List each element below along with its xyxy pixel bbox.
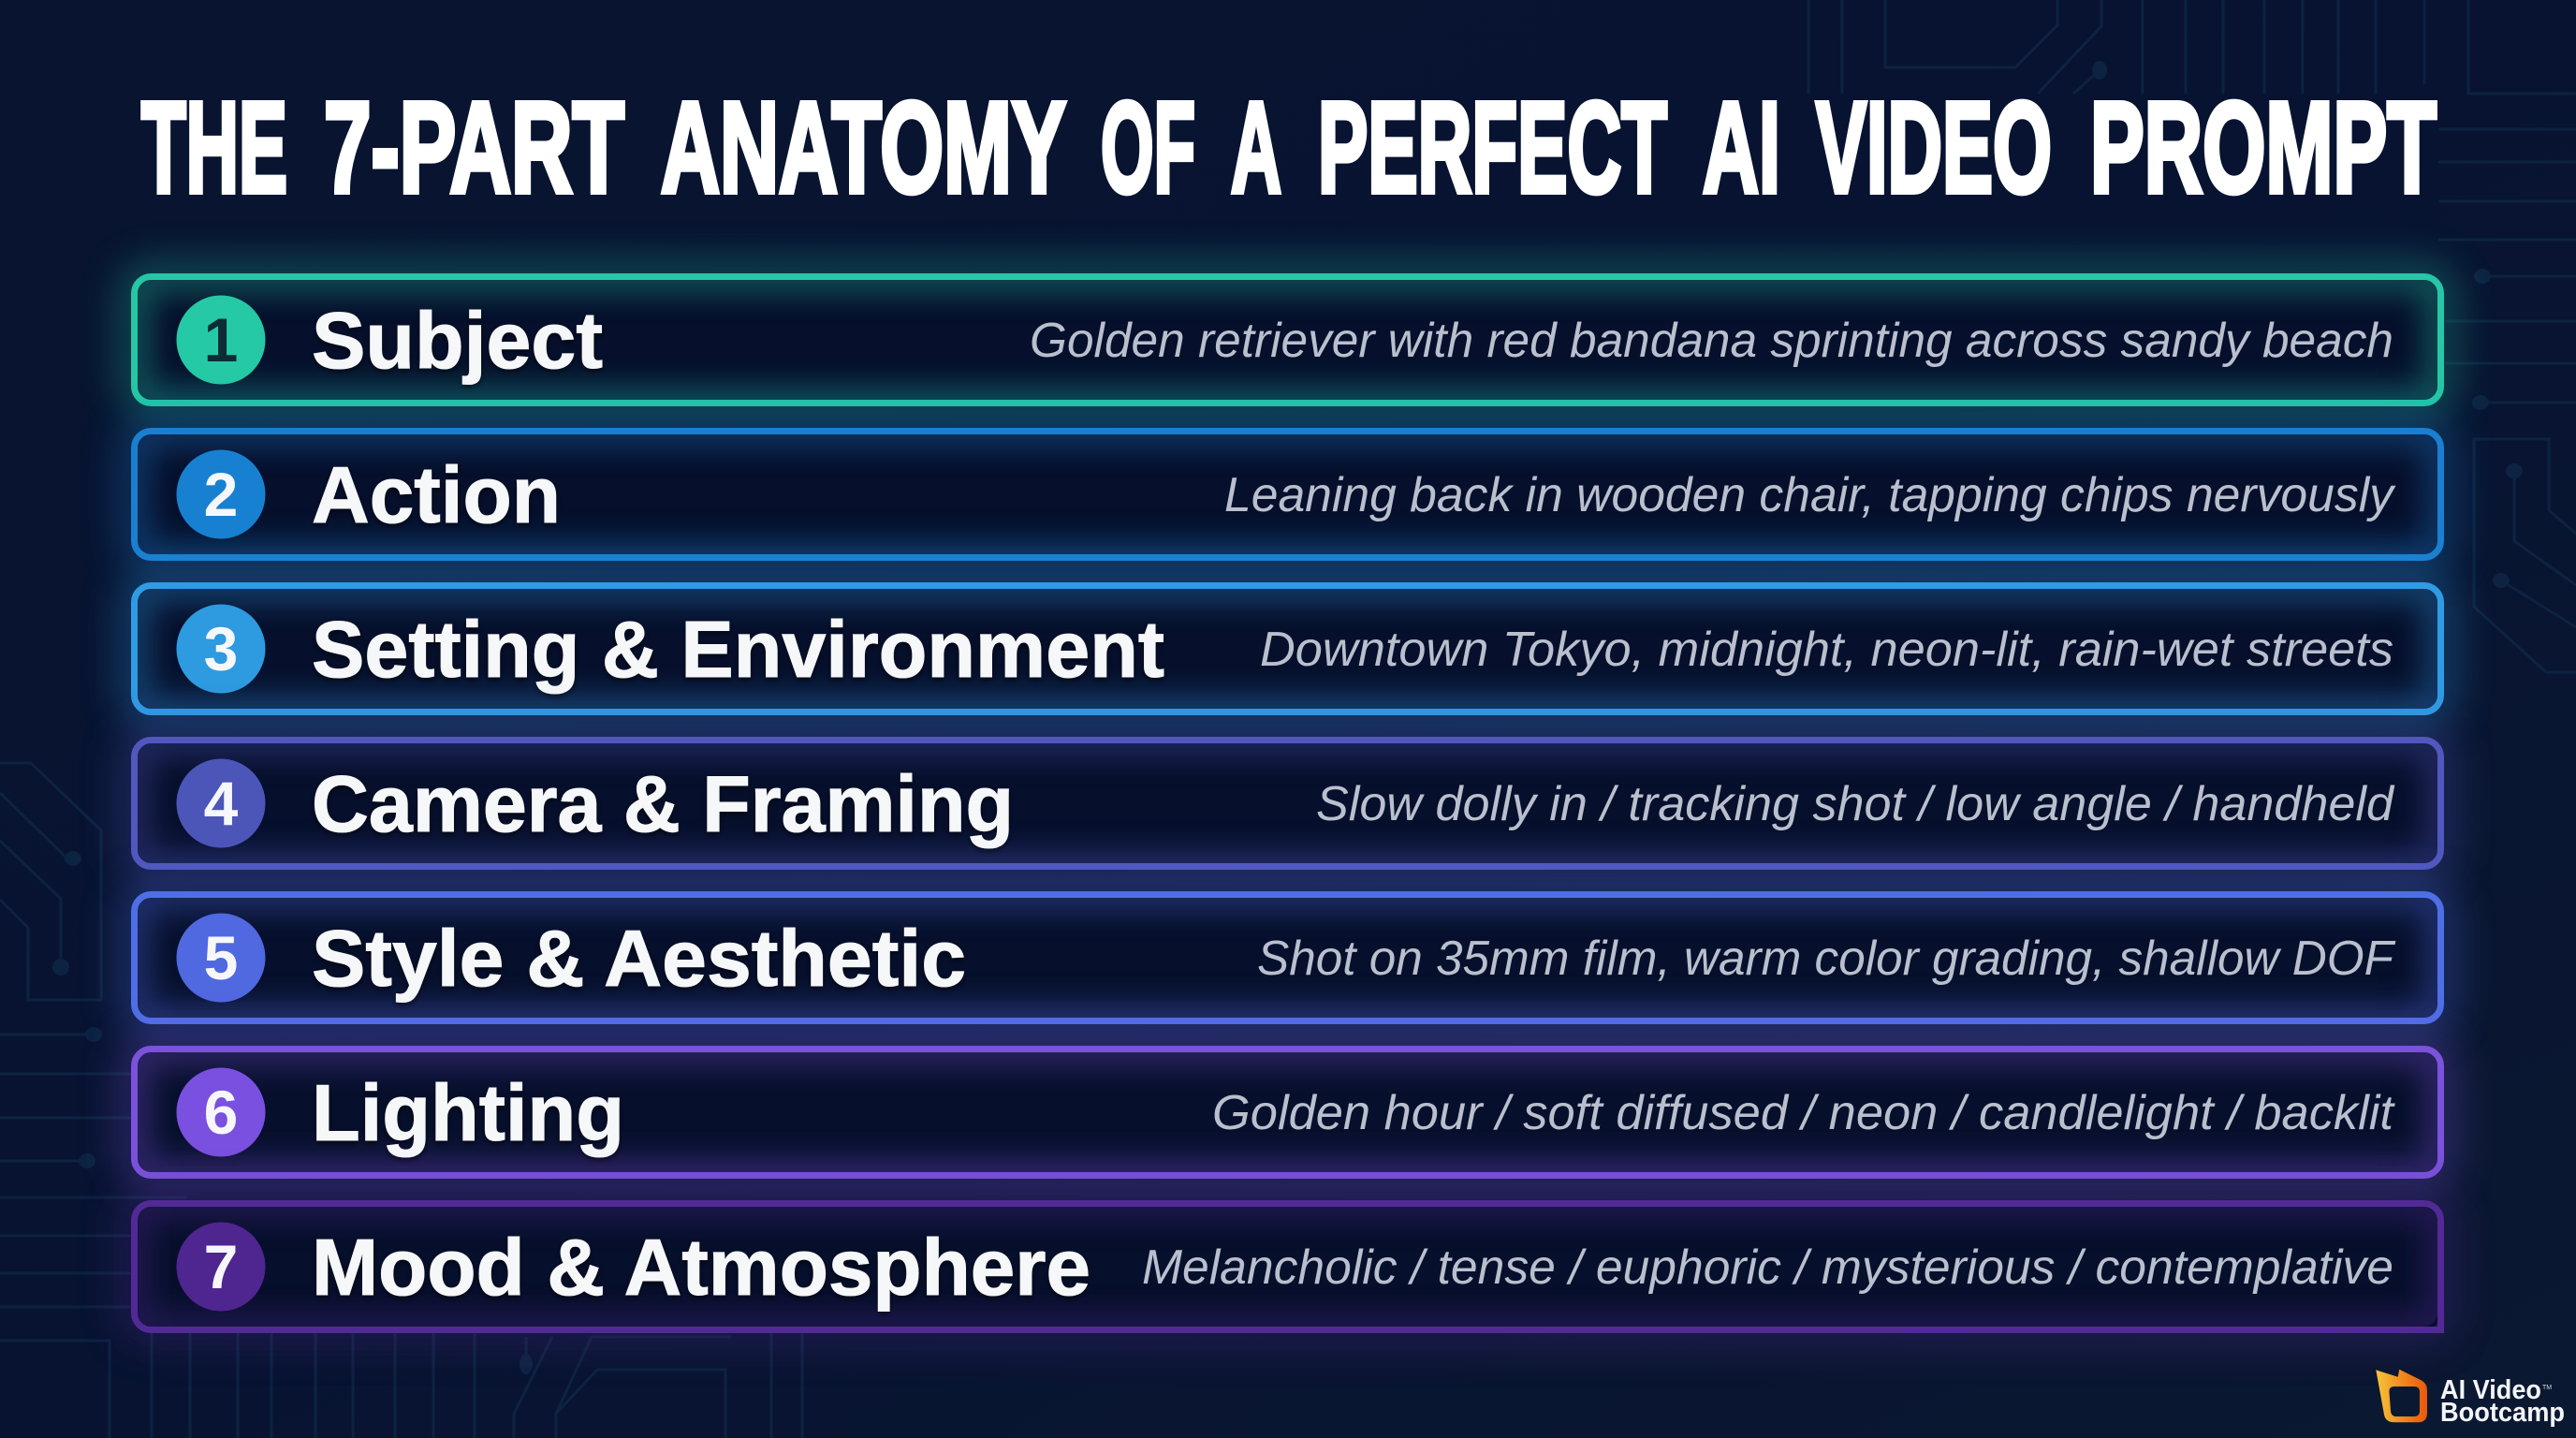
description: Action: Leaning back in wooden chair, tapping chips nervously [1224, 468, 2396, 522]
number badge 1: 1 [204, 305, 238, 374]
description: Setting & Environment: Downtown Tokyo, midnight, neon-lit, rain-wet streets [1260, 623, 2393, 677]
title: PERFECT [1318, 76, 1667, 220]
number badge 4 [176, 758, 266, 848]
panel: 5 style and aesthetic [135, 895, 2441, 1020]
title: VIDEO [1816, 76, 2052, 220]
label: Action: Action [312, 451, 561, 540]
label: Lighting: Lighting [312, 1069, 624, 1158]
number badge 7: 7 [204, 1232, 238, 1301]
number badge 1 [176, 296, 266, 384]
icon: flame-shaped screen [2376, 1370, 2427, 1422]
wordmark: TM [2542, 1385, 2552, 1391]
panel: 2 action [135, 431, 2441, 558]
description: Camera & Framing: Slow dolly in / tracking shot / low angle / handheld [1316, 777, 2395, 831]
number badge 7 [176, 1223, 266, 1311]
number badge 5: 5 [204, 923, 238, 992]
number badge 2: 2 [204, 460, 238, 529]
panel: 6 lighting [135, 1049, 2441, 1176]
title: ANATOMY [661, 76, 1066, 220]
description: Lighting: Golden hour / soft diffused / neon / candlelight / backlit [1212, 1086, 2396, 1140]
title: A [1231, 76, 1281, 220]
label: Style & Aesthetic: Style & Aesthetic [312, 915, 966, 1004]
number badge 2 [176, 449, 266, 539]
description: Subject: Golden retriever with red bandana sprinting across sandy beach [1030, 314, 2393, 368]
label: Subject: Subject [312, 297, 603, 386]
wordmark [2440, 1375, 2565, 1428]
description: Mood & Atmosphere: Melancholic / tense / euphoric / mysterious / contemplative [1142, 1240, 2393, 1295]
label: Mood & Atmosphere: Mood & Atmosphere [312, 1224, 1090, 1313]
panel: 1 subject [135, 277, 2441, 403]
number badge 3: 3 [204, 614, 238, 683]
logo: AI Video Bootcamp [2376, 1370, 2565, 1428]
number badge 5 [176, 914, 266, 1002]
title: OF [1101, 76, 1195, 220]
number badge 6: 6 [204, 1078, 238, 1147]
title: AI [1703, 76, 1780, 220]
panel: 7 mood and atmosphere [135, 1204, 2441, 1329]
title: 7-PART [324, 76, 624, 220]
title: THE [141, 76, 287, 220]
number badge 3 [176, 605, 266, 693]
label: Camera & Framing: Camera & Framing [312, 760, 1014, 849]
title [141, 76, 2437, 220]
label: Setting & Environment: Setting & Environment [312, 606, 1164, 695]
description: Style & Aesthetic: Shot on 35mm film, warm color grading, shallow DOF [1257, 932, 2396, 986]
wordmark: AI Video [2440, 1375, 2541, 1405]
panel: 4 camera and framing [135, 740, 2441, 867]
number badge 6 [176, 1067, 266, 1157]
wordmark: Bootcamp [2440, 1398, 2565, 1428]
panel: 3 setting and environment [135, 586, 2441, 712]
number badge 4: 4 [204, 769, 239, 838]
